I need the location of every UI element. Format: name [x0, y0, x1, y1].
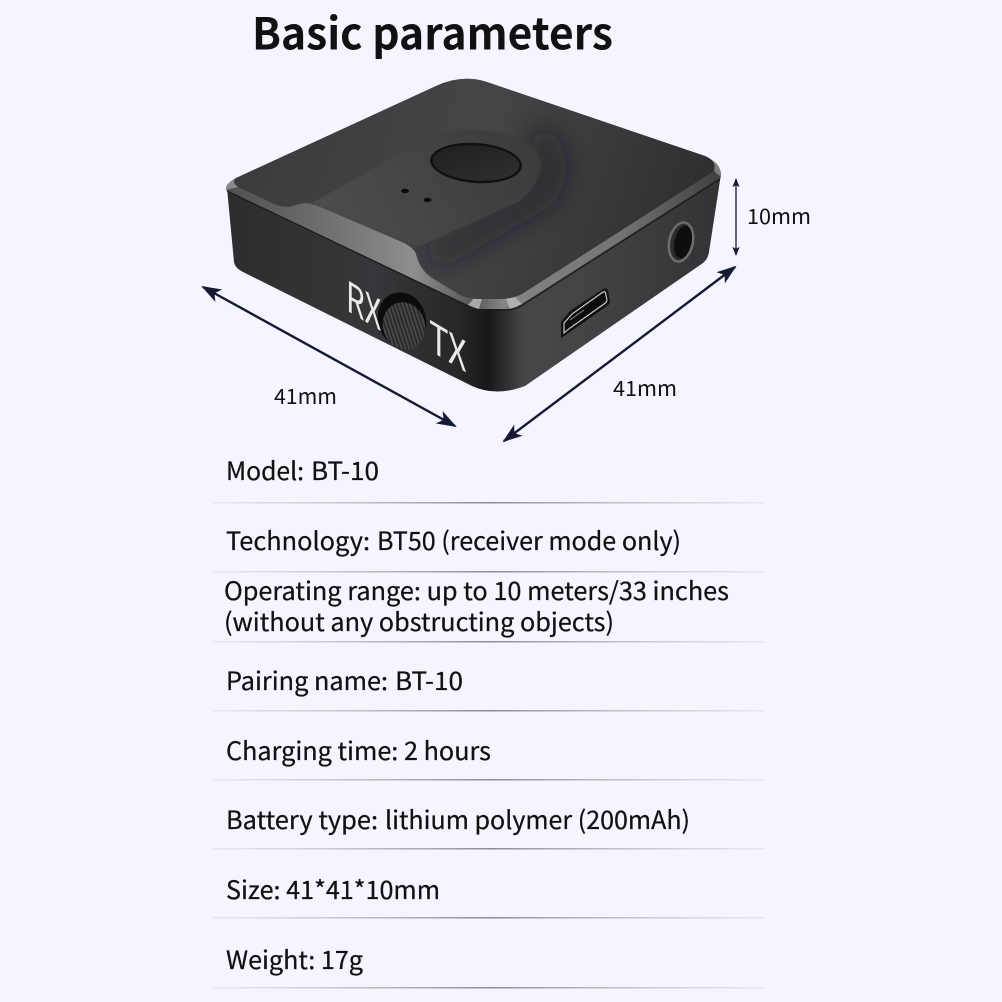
device side walls [227, 174, 721, 392]
specification: pairing name: BT-10 [395, 662, 463, 698]
title: Basic parameters [252, 0, 613, 62]
specification: battery type: lithium polymer (200mAh) [385, 801, 690, 837]
specification: pairing name: Pairing name: [226, 662, 388, 698]
specification: battery type [226, 801, 690, 837]
specification: model: Model: [226, 452, 304, 488]
device corner facets [226, 158, 721, 309]
device recessed panel [312, 130, 541, 246]
specification: model [226, 452, 379, 488]
micro USB port [561, 288, 610, 338]
dimension label: height: 10mm [747, 201, 811, 231]
specification: size: Size: 41*41*10mm [226, 871, 440, 907]
specification: model: BT-10 [311, 452, 379, 488]
device top plate [234, 79, 715, 299]
specification: technology: Technology: [226, 522, 370, 558]
TX label: TX [429, 301, 467, 385]
audio jack [664, 219, 698, 265]
dimension arrow: front width [203, 287, 455, 426]
product illustration: BT-10 device [226, 79, 721, 392]
device bevel edge [226, 79, 721, 309]
specification: operating range [224, 572, 729, 639]
specification: operating range: (without any obstructing objects) [224, 603, 614, 639]
specification: weight: Weight: 17g [226, 941, 363, 977]
dimension arrow: side width [504, 267, 735, 441]
dimension arrow: height [735, 179, 737, 255]
specification: battery type: Battery type: [226, 801, 378, 837]
indicator lights [401, 189, 432, 202]
RX label: RX [346, 263, 381, 344]
power button [429, 140, 523, 186]
specification: charging time: Charging time: 2 hours [226, 732, 491, 768]
dimension label: side width: 41mm [613, 373, 677, 403]
specification: technology: BT50 (receiver mode only) [377, 522, 681, 558]
specification: pairing name [226, 662, 463, 698]
mode switch [371, 286, 433, 355]
dimension label: front width: 41mm [274, 381, 337, 411]
specification: technology [226, 522, 681, 558]
recess shadow [430, 135, 551, 258]
specification: operating range: Operating range: up to 10 meters/33 inches [224, 572, 729, 608]
